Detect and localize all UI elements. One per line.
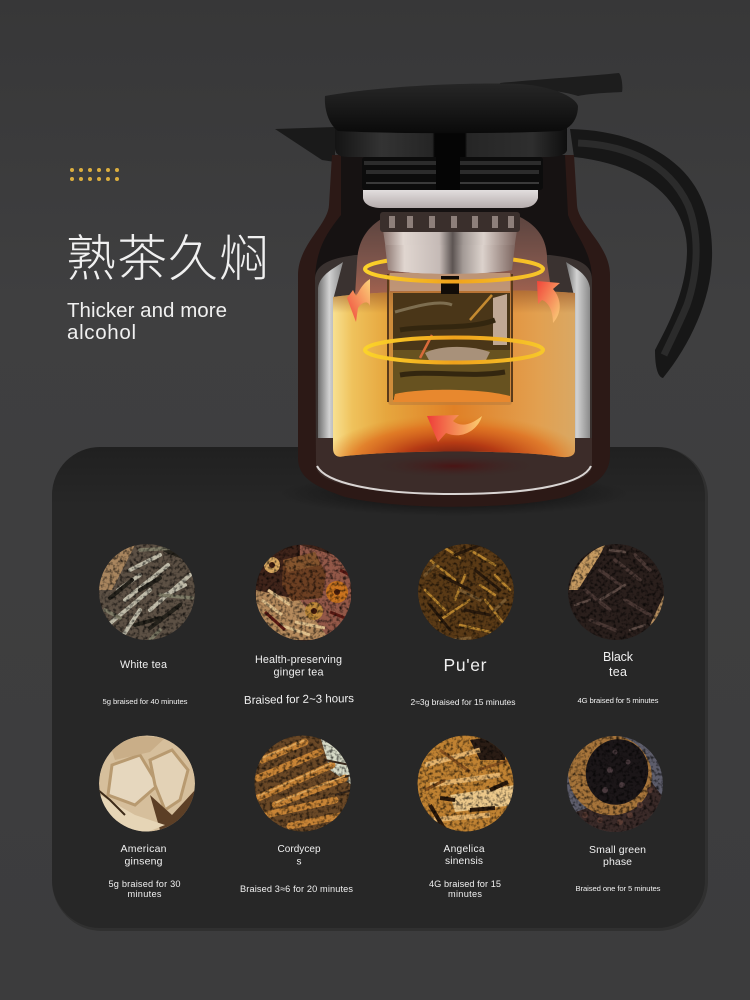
name: American	[120, 843, 167, 855]
name: White tea	[120, 659, 167, 671]
item: Pu'er	[410, 544, 516, 707]
teapot	[275, 73, 712, 516]
glass inner	[315, 255, 592, 494]
spout	[275, 127, 335, 162]
dose: 5g braised for 40 minutes	[102, 697, 188, 706]
steel cylinder	[383, 230, 517, 274]
item: Health-preserving ginger tea	[244, 544, 354, 707]
dose: Braised for 2~3 hours	[244, 693, 354, 707]
white seal ring	[363, 190, 538, 208]
infuser cup	[388, 273, 512, 405]
collar	[335, 128, 567, 157]
photo: white tea	[99, 544, 195, 640]
dose: 2≈3g braised for 15 minutes	[410, 697, 516, 707]
item: Angelica sinensis	[417, 735, 515, 899]
steel ridged band	[380, 212, 520, 232]
name: Angelica	[444, 844, 485, 855]
name: Cordycep	[278, 844, 321, 855]
arrow: left heat	[347, 279, 370, 322]
decorative dots	[70, 168, 119, 181]
subtitle: Thicker and more	[67, 299, 227, 322]
name: tea	[609, 665, 627, 679]
lid	[325, 84, 578, 133]
heat ring lower	[365, 338, 543, 362]
photo: black tea	[568, 544, 664, 640]
name: ginger tea	[274, 666, 324, 678]
item: White tea	[99, 544, 195, 706]
name: ginseng	[124, 856, 163, 868]
name: Pu'er	[444, 655, 487, 675]
lid tab	[500, 73, 622, 96]
name: Black	[603, 650, 634, 664]
body outer brown wall	[298, 155, 610, 507]
dose: 5g braised for 30	[108, 879, 180, 889]
arrow: bottom heat	[427, 415, 482, 442]
photo: small green phase	[567, 736, 663, 832]
name: Small green	[589, 844, 646, 856]
heat ring upper	[365, 256, 543, 282]
photo: angelica	[417, 735, 515, 832]
item: Black tea	[568, 544, 664, 705]
handle	[570, 129, 712, 378]
photo: cordyceps	[254, 735, 352, 832]
dose: minutes	[448, 889, 482, 899]
inner dark shoulder	[315, 155, 592, 280]
dose: 4G braised for 5 minutes	[578, 696, 659, 705]
dose: Braised one for 5 minutes	[576, 884, 661, 893]
threaded neck	[362, 157, 543, 190]
item: American ginseng	[98, 736, 195, 899]
panel: tea varieties background	[52, 447, 708, 931]
silver left strip	[318, 262, 343, 440]
glass floor	[316, 438, 592, 494]
name: s	[296, 856, 302, 868]
silver right strip	[566, 262, 590, 440]
item: Small green phase	[567, 736, 663, 891]
name: Health-preserving	[255, 654, 342, 666]
dose: Braised 3≈6 for 20 minutes	[240, 884, 353, 894]
photo: pu'er	[418, 544, 514, 640]
liquid	[333, 290, 575, 458]
arrow: right heat	[537, 281, 560, 323]
item: Cordyceps	[240, 735, 353, 894]
dose: minutes	[128, 889, 162, 899]
title: 熟茶久焖	[66, 219, 269, 291]
name: sinensis	[445, 856, 483, 867]
dose: 4G braised for 15	[429, 879, 501, 889]
steel front overlap upper	[385, 245, 515, 274]
subtitle: alcohol	[67, 321, 136, 344]
photo: ginger tea	[255, 544, 352, 641]
photo: american ginseng	[98, 736, 195, 835]
upper glow	[355, 217, 552, 296]
shadow under teapot	[279, 472, 629, 516]
name: phase	[603, 856, 632, 868]
